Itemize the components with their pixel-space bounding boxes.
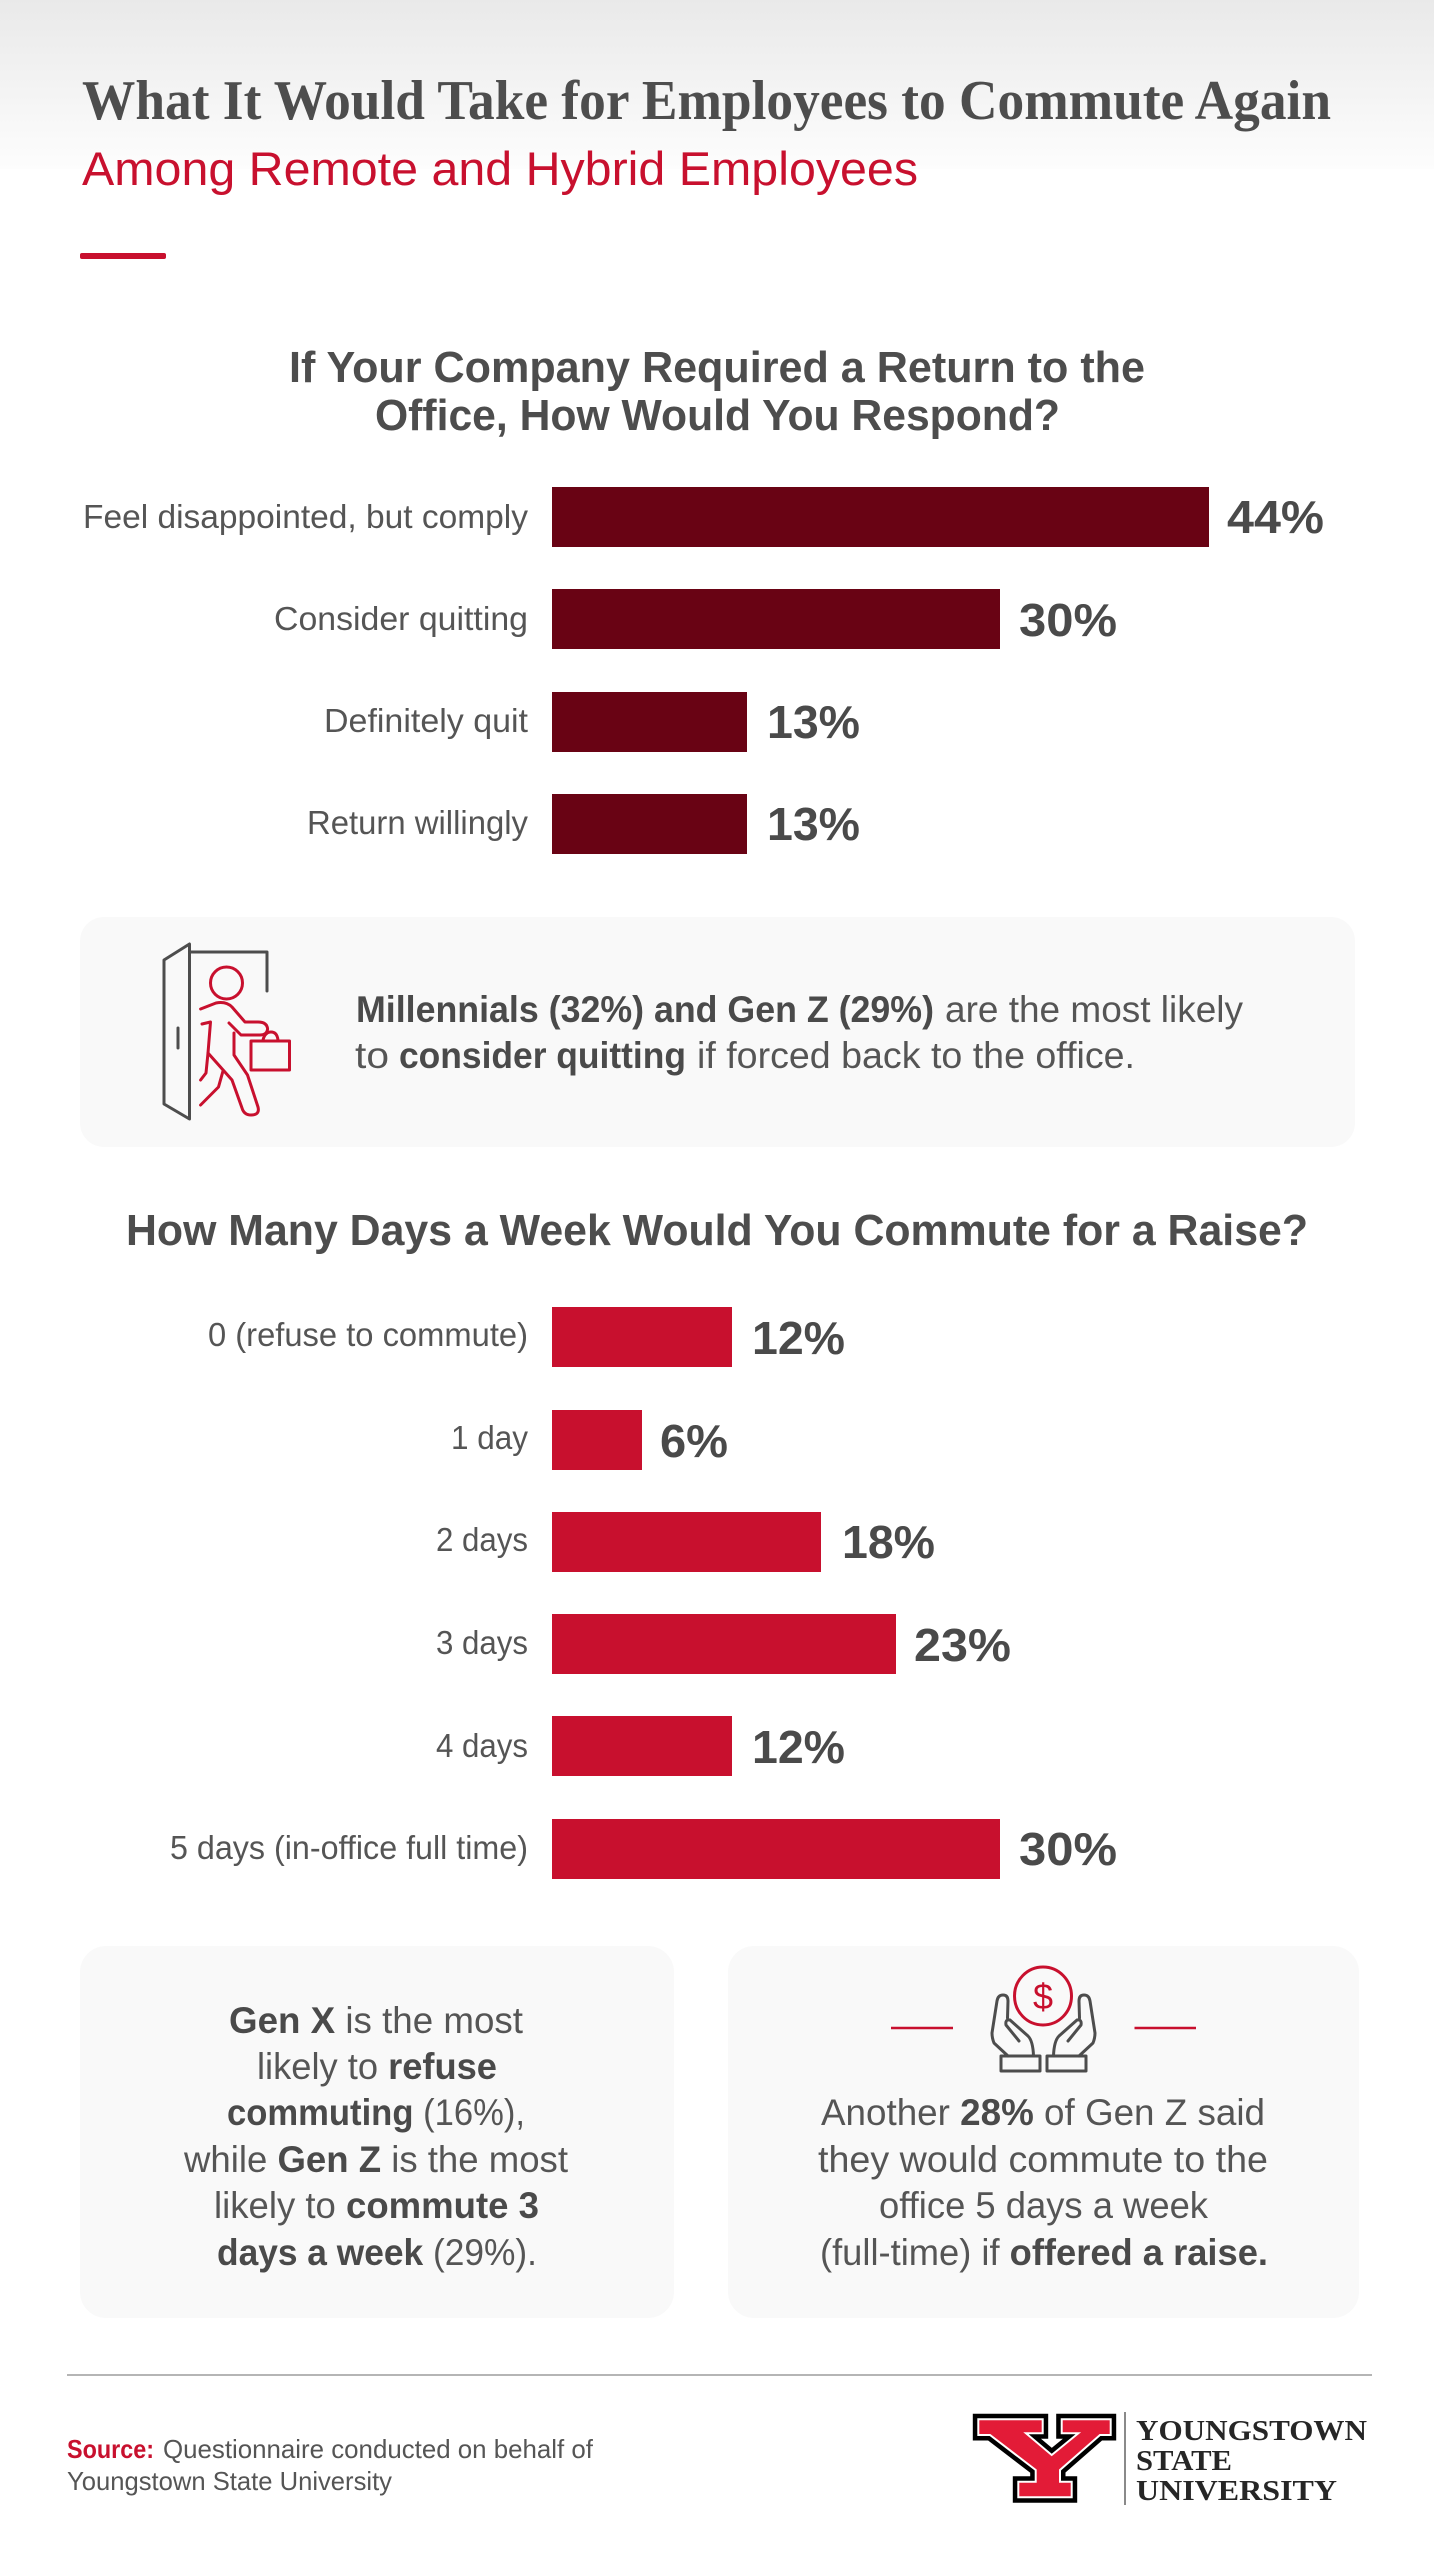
icon: hands holding dollar coin — [891, 1967, 1196, 2071]
bar row: Definitely quit 13%: Definitely quit — [324, 702, 528, 739]
bar row: 4 days 12%: 4 days — [436, 1727, 528, 1764]
source note: Questionnaire conducted on behalf of — [163, 2434, 594, 2464]
bar row: Definitely quit 13% — [324, 692, 860, 752]
bar row: 1 day 6% — [451, 1410, 728, 1470]
bar row: Return willingly 13% — [307, 794, 860, 854]
bar row: 4 days 12%: 12% — [752, 1721, 845, 1773]
heading: return to office — [289, 343, 1145, 440]
title: What It Would Take for Employees to Commute Again — [82, 70, 1331, 132]
subtitle: Among Remote and Hybrid Employees — [82, 142, 918, 195]
panel: raise offer — [728, 1946, 1359, 2318]
callout text: Millennials (32%) and Gen Z (29%) — [356, 989, 934, 1030]
callout text: to — [355, 1035, 389, 1076]
bar row: 1 day 6%: 6% — [660, 1415, 728, 1467]
bar row: 5 days 30% — [170, 1819, 1117, 1879]
bar row: 2 days 18% — [436, 1512, 935, 1572]
source note: Youngstown State University — [67, 2466, 392, 2496]
bar row: 0 days 12%: 12% — [752, 1312, 845, 1364]
heading: return to office: Office, How Would You Respond? — [375, 391, 1060, 440]
bar row: Consider quitting 30%: Consider quitting — [274, 600, 528, 637]
bar row: Return willingly 13%: 13% — [767, 798, 860, 850]
bar row: Definitely quit 13%: 13% — [767, 696, 860, 748]
bar row: 4 days 12% — [436, 1716, 845, 1776]
panel text: days a week (29%). — [217, 2232, 537, 2273]
bar row: 2 days 18%: 2 days — [436, 1521, 528, 1558]
panel text: commuting (16%), — [227, 2092, 525, 2133]
bar row: 5 days 30%: 5 days (in-office full time) — [170, 1829, 528, 1866]
icon: person leaving through door — [164, 944, 290, 1119]
panel: millennials callout — [80, 917, 1355, 1147]
panel text: Another 28% of Gen Z said — [821, 2092, 1265, 2133]
logo wordmark: STATE — [1136, 2445, 1232, 2477]
bar row: Return willingly 13%: Return willingly — [307, 804, 528, 841]
callout text: if forced back to the office. — [697, 1035, 1135, 1076]
bar row: 3 days 23%: 23% — [914, 1619, 1011, 1671]
footer divider — [67, 2374, 1372, 2376]
icon: hands holding dollar coin: $ — [1033, 1976, 1053, 2017]
bar row: Feel disappointed 44%: Feel disappointed, but comply — [83, 498, 528, 535]
bar chart: days a week for a raise — [170, 1307, 1117, 1879]
bar row: 3 days 23%: 3 days — [436, 1624, 528, 1661]
header band — [0, 0, 1434, 169]
source note: Source: — [67, 2434, 154, 2464]
heading: return to office: If Your Company Required a Return to the — [289, 343, 1145, 392]
bar row: 0 days 12%: 0 (refuse to commute) — [208, 1316, 528, 1353]
bar row: 5 days 30%: 30% — [1019, 1823, 1117, 1875]
bar row: 1 day 6%: 1 day — [451, 1419, 528, 1456]
logo: Youngstown State University — [978, 2412, 1367, 2507]
panel text: (full-time) if offered a raise. — [820, 2232, 1268, 2273]
logo wordmark: UNIVERSITY — [1136, 2475, 1337, 2507]
panel text — [818, 2092, 1268, 2273]
logo wordmark: YOUNGSTOWN — [1136, 2415, 1367, 2447]
panel text: office 5 days a week — [879, 2185, 1208, 2226]
bar row: Feel disappointed 44%: 44% — [1227, 491, 1324, 543]
bar row: Consider quitting 30% — [274, 589, 1117, 649]
callout text: are the most likely — [945, 989, 1243, 1030]
logo wordmark — [1136, 2415, 1367, 2507]
panel text: while Gen Z is the most — [183, 2139, 569, 2180]
panel: Gen X and Gen Z — [80, 1946, 674, 2318]
bar chart: return to office responses — [83, 487, 1324, 854]
panel text: likely to refuse — [257, 2046, 497, 2087]
bar row: 3 days 23% — [436, 1614, 1011, 1674]
panel text — [183, 2000, 569, 2273]
source note — [67, 2434, 594, 2496]
bar row: 0 days 12% — [208, 1307, 845, 1367]
callout text — [355, 989, 1243, 1076]
callout text: consider quitting — [399, 1035, 686, 1076]
bar row: Feel disappointed 44% — [83, 487, 1324, 547]
panel text: Gen X is the most — [229, 2000, 524, 2041]
accent dash — [80, 253, 166, 259]
bar row: 2 days 18%: 18% — [842, 1516, 935, 1568]
panel text: they would commute to the — [818, 2139, 1268, 2180]
logo mark: block Y — [978, 2419, 1111, 2497]
panel text: likely to commute 3 — [214, 2185, 539, 2226]
bar row: Consider quitting 30%: 30% — [1019, 594, 1117, 646]
heading: commute for a raise: How Many Days a Week Would You Commute for a Raise? — [126, 1206, 1308, 1255]
